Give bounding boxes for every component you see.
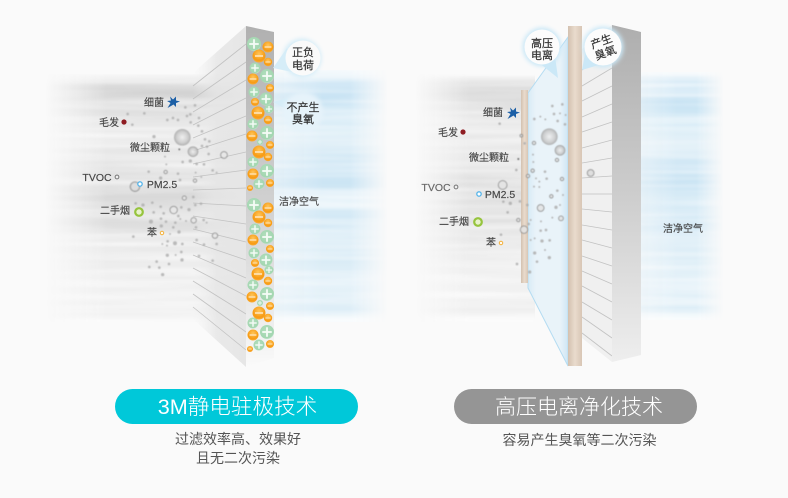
callout: produces ozone: 产生	[589, 31, 614, 52]
pollutant labels and markers: 细菌	[144, 96, 164, 109]
dirty air smoke band	[60, 77, 216, 314]
panel: high-voltage ionisation diagram	[415, 25, 724, 366]
grey dust particles	[498, 103, 594, 274]
pollutant labels and markers: 细菌	[483, 106, 503, 119]
callout: positive and negative charges: 正负	[292, 45, 314, 59]
pollutant labels and markers	[421, 106, 703, 249]
callout: high-voltage ionisation	[522, 28, 562, 78]
charged particles, positive and negative	[246, 37, 274, 352]
callout: produces ozone	[582, 26, 624, 70]
pollutant labels and markers: 微尘颗粒	[469, 151, 509, 164]
caption: high filtration efficiency	[175, 431, 301, 466]
filter grey slab	[612, 25, 641, 362]
pollutant labels and markers: 苯	[486, 236, 496, 249]
marker: benzene	[499, 241, 503, 245]
callout: positive and negative charges	[273, 38, 322, 78]
marker: hair	[121, 119, 127, 125]
caption: high filtration efficiency: 且无二次污染	[196, 450, 280, 466]
icon: bacteria	[167, 96, 180, 108]
pollutant labels and markers: 洁净空气	[663, 222, 703, 235]
caption: secondary ozone pollution: 容易产生臭氧等二次污染	[502, 432, 656, 448]
button: high-voltage ionisation technology: 高压电离净化技术	[495, 396, 663, 419]
ionisation glass plane	[528, 37, 568, 366]
marker: hair	[460, 129, 466, 135]
marker: benzene	[160, 231, 164, 235]
small electrode pole	[521, 90, 528, 283]
clean air blue band	[641, 75, 719, 316]
callout: produces no ozone: 臭氧	[292, 112, 314, 126]
pollutant labels and markers: 毛发	[99, 116, 119, 129]
pollutant labels and markers: 二手烟	[100, 204, 130, 217]
callout: positive and negative charges: 电荷	[292, 59, 314, 72]
button: 3M electrostatic electret technology	[115, 389, 358, 424]
marker: PM2.5	[477, 192, 481, 196]
main electrode pole	[568, 26, 582, 366]
filter front strip	[246, 26, 274, 367]
pollutant labels and markers: TVOC	[421, 182, 451, 194]
pollutant labels and markers: 苯	[147, 226, 157, 239]
dirty air smoke band	[431, 78, 535, 313]
callout: produces no ozone: 不产生	[286, 100, 320, 114]
marker: TVOC	[115, 175, 119, 179]
button: 3M electrostatic electret technology: 3M静电驻极技术	[158, 394, 317, 419]
grey dust particles	[126, 104, 227, 276]
icon: bacteria	[507, 108, 520, 119]
pollutant labels and markers: 毛发	[438, 126, 458, 139]
marker: second-hand smoke	[474, 218, 482, 226]
panel: 3M electrostatic filter diagram	[45, 26, 388, 367]
marker: second-hand smoke	[135, 208, 143, 216]
callout: high-voltage ionisation: 电离	[531, 48, 553, 62]
pollutant labels and markers: 洁净空气	[279, 195, 319, 208]
pollutant labels and markers: 微尘颗粒	[130, 141, 170, 154]
pollutant labels and markers: 二手烟	[439, 215, 469, 228]
pollutant labels and markers: PM2.5	[147, 179, 177, 191]
filter face with pleat lines	[582, 25, 612, 362]
filter side face with pleat lines	[193, 26, 246, 367]
clean air blue band	[274, 72, 381, 316]
marker: PM2.5	[138, 182, 142, 186]
callout: produces no ozone	[273, 92, 323, 132]
marker: TVOC	[454, 185, 458, 189]
caption: high filtration efficiency: 过滤效率高、效果好	[175, 431, 301, 447]
pollutant labels and markers	[82, 96, 319, 239]
pollutant labels and markers: TVOC	[82, 172, 112, 184]
callout: high-voltage ionisation: 高压	[531, 36, 553, 50]
button: high-voltage ionisation technology	[454, 389, 697, 424]
callout: produces ozone: 臭氧	[593, 42, 618, 63]
pollutant labels and markers: PM2.5	[485, 189, 515, 201]
